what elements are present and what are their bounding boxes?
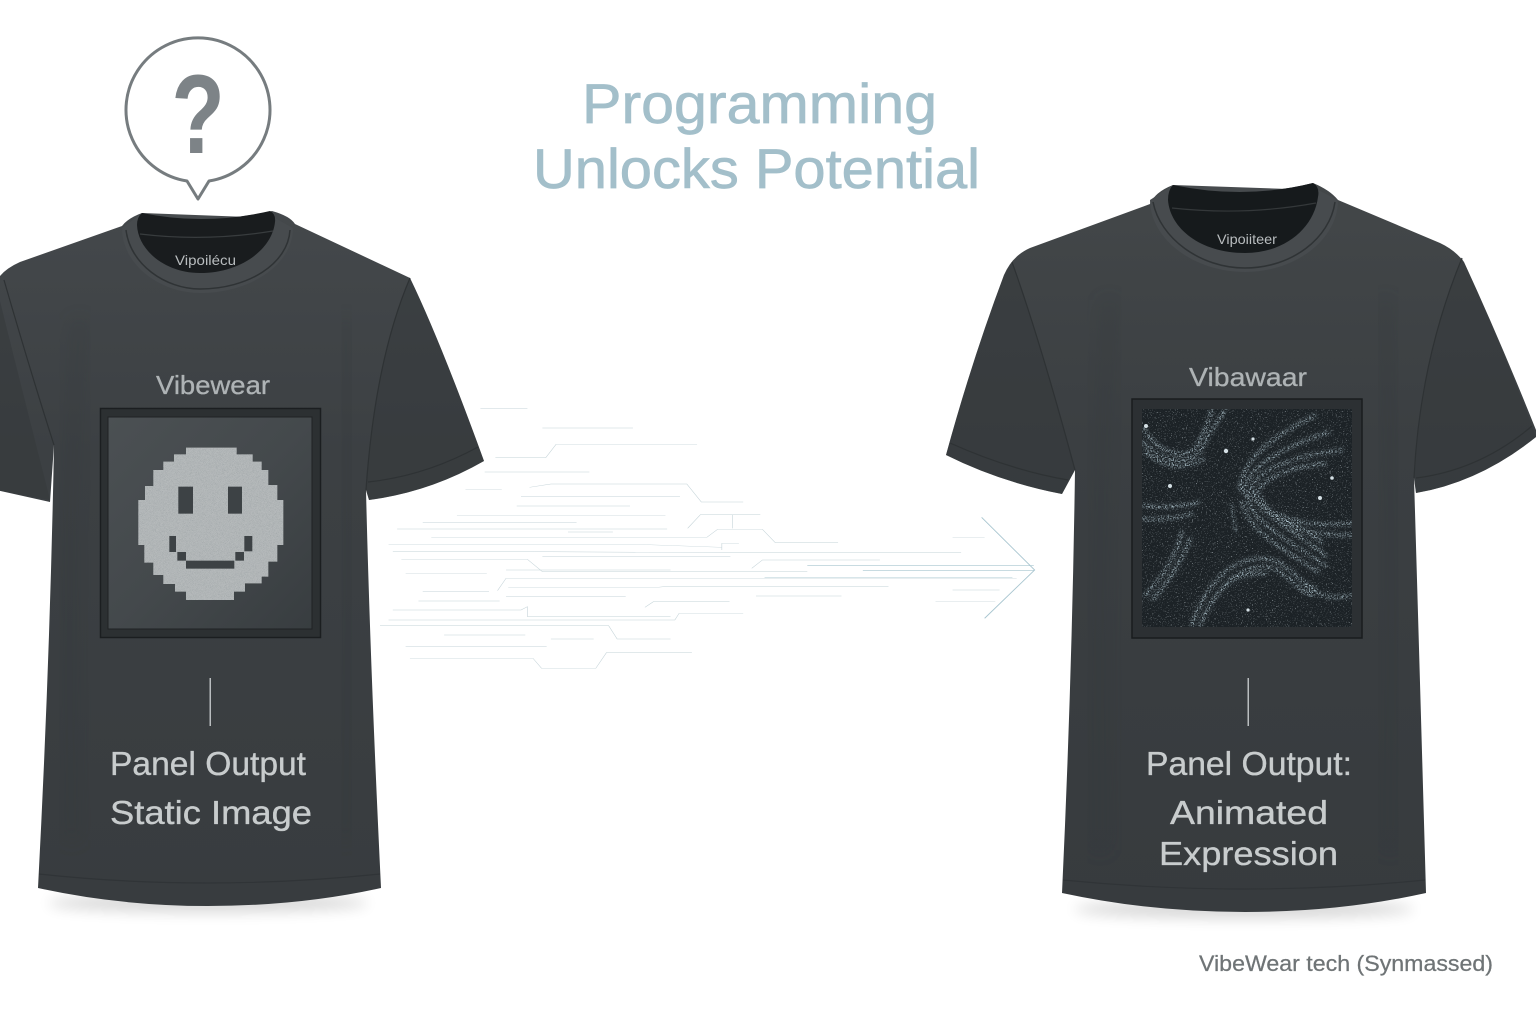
sparkles	[1144, 424, 1334, 612]
collar right	[1150, 183, 1338, 272]
circuit traces	[380, 408, 1017, 668]
collar tag text right: Vipoiiteer	[1217, 231, 1277, 247]
arrowhead	[982, 517, 1035, 618]
caption right: Expression	[1159, 835, 1338, 872]
icon: question speech bubble	[126, 38, 270, 199]
right t-shirt	[946, 183, 1536, 918]
connector line right	[1248, 678, 1249, 726]
title	[533, 72, 980, 200]
collar tag text left: Vipoilécu	[175, 252, 236, 268]
footer credit: VibeWear tech (Synmassed)	[1199, 951, 1493, 976]
title: Unlocks Potential	[533, 137, 980, 200]
caption right: Animated	[1170, 794, 1328, 831]
shirt body right	[946, 183, 1536, 912]
brand text left: Vibewear	[156, 370, 270, 400]
caption left: Static Image	[110, 794, 312, 831]
icon: question speech bubble: ?	[171, 53, 225, 178]
connector line left	[210, 678, 211, 726]
arrow: dissolving circuit lines	[380, 408, 1035, 668]
collar left	[122, 211, 293, 293]
display panel: static smiley	[100, 408, 320, 638]
caption left: Panel Output	[110, 745, 306, 782]
icon: pixel smiley	[138, 448, 283, 600]
sleeve shading right	[946, 258, 1536, 889]
left t-shirt	[0, 211, 484, 912]
caption right	[1146, 745, 1352, 872]
caption left	[110, 745, 312, 831]
display panel: animated swirl	[1132, 399, 1362, 638]
swirl texture	[1142, 409, 1352, 627]
caption right: Panel Output:	[1146, 745, 1352, 782]
title: Programming	[582, 72, 937, 135]
sleeve shading left	[0, 278, 484, 883]
brand text right: Vibawaar	[1189, 362, 1307, 392]
shirt body left	[0, 211, 484, 906]
arrow shaft	[765, 566, 1034, 578]
